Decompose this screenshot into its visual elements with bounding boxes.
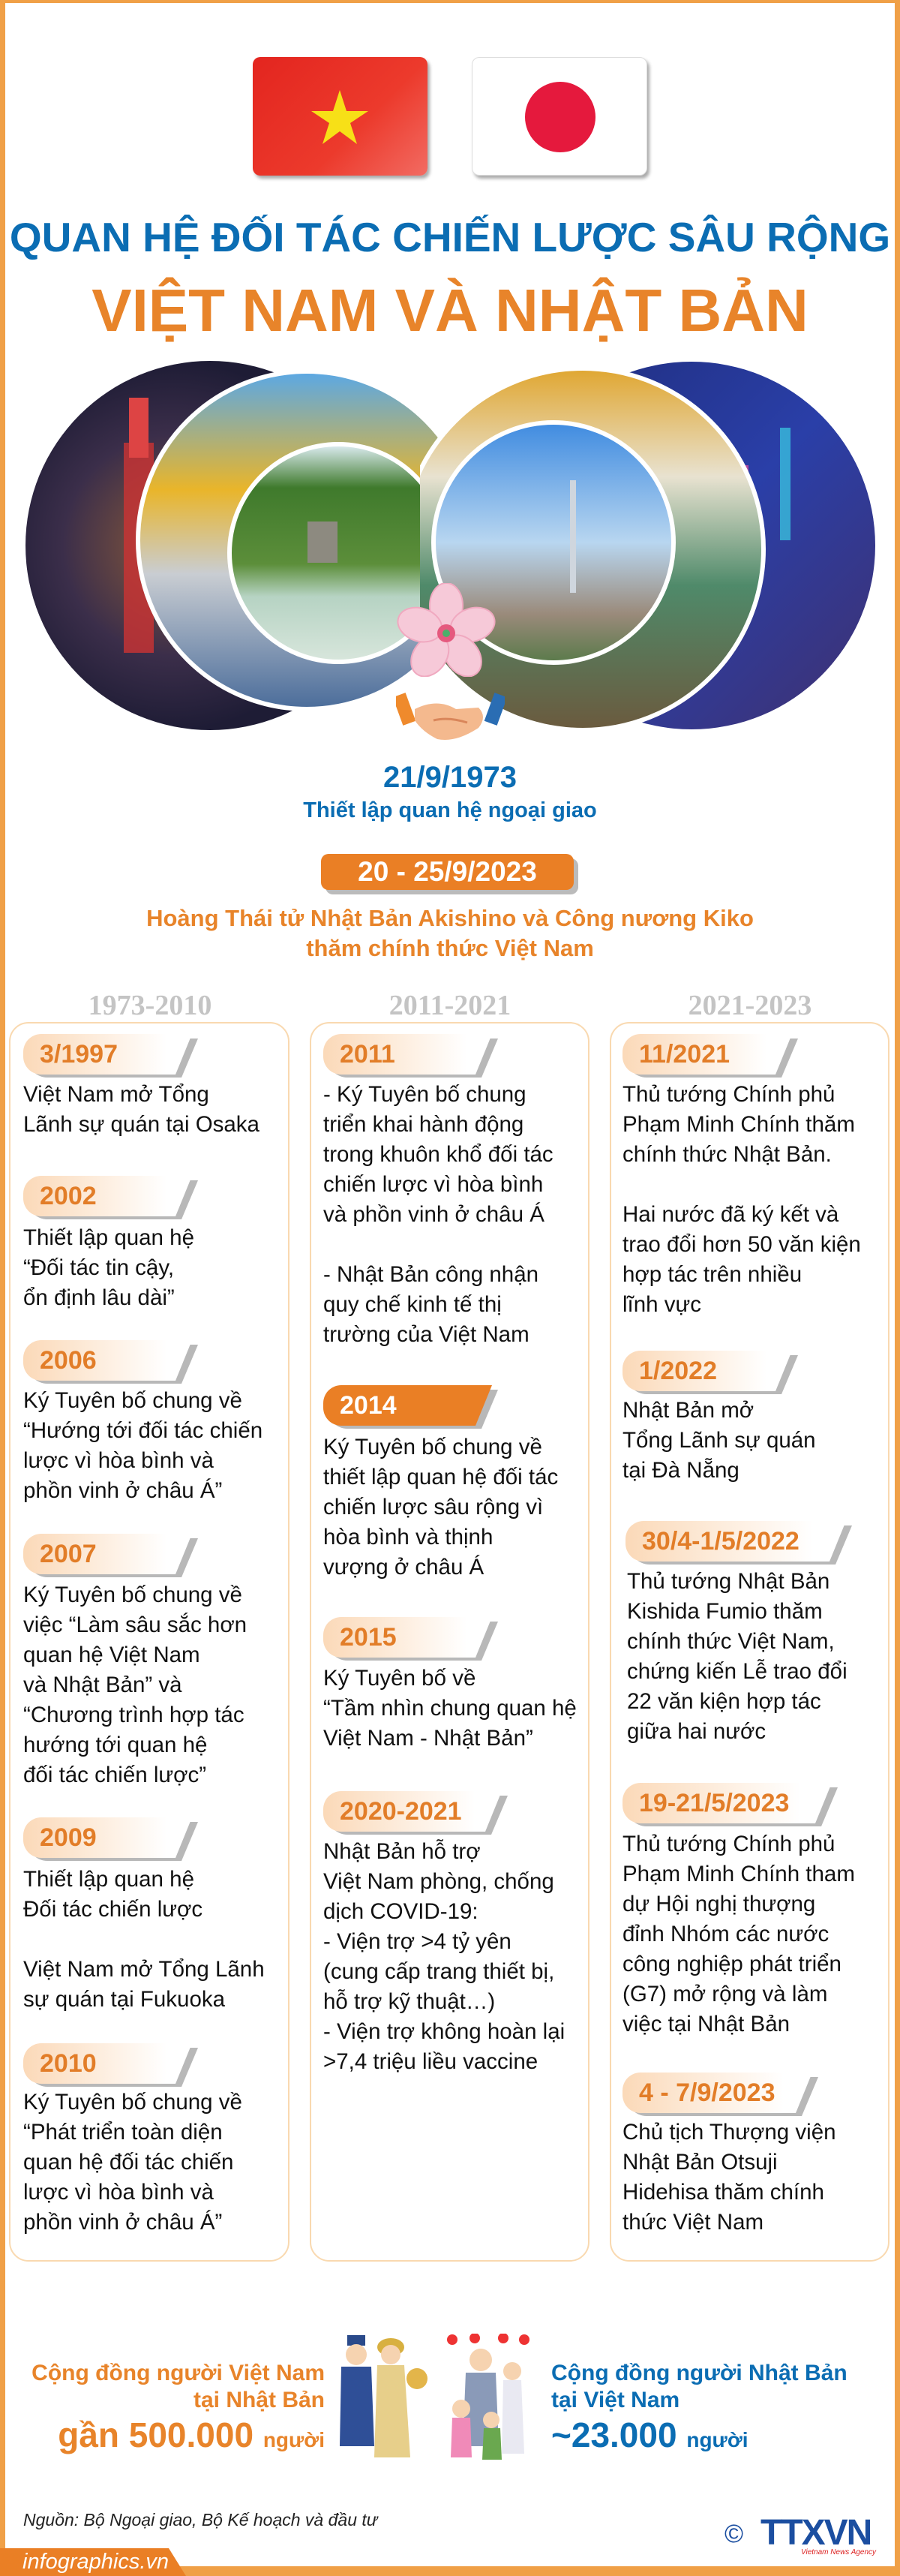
text: 2011: trong khuôn khổ đối tác: [323, 1142, 554, 1167]
text: 1/2022: tại Đà Nẵng: [622, 1458, 740, 1483]
text: 2014: chiến lược sâu rộng vì: [323, 1495, 543, 1519]
footer bar: infographics.vn: [22, 2550, 169, 2574]
text: 11/2021: Phạm Minh Chính thăm: [622, 1112, 855, 1137]
text: 2007: Ký Tuyên bố chung về: [23, 1583, 242, 1607]
text: 2007: quan hệ Việt Nam: [23, 1643, 200, 1667]
text: 19-21/5/2023: dự Hội nghị thượng: [622, 1892, 815, 1916]
column header 1: 1973-2010: [88, 990, 212, 1021]
text: 2010: quan hệ đối tác chiến: [23, 2150, 233, 2175]
pill: 3/1997: 3/1997: [40, 1040, 118, 1069]
text: Vietnamese community in Japan: tại Nhật Bản: [194, 2388, 325, 2412]
pill: 2010: 2010: [40, 2049, 97, 2078]
text: 2015: [323, 1666, 577, 1751]
icon: handshake: [396, 693, 505, 740]
text: 2006: [23, 1388, 262, 1503]
text: 4 - 7/9/2023: [622, 2120, 836, 2235]
text: 2009: Thiết lập quan hệ: [23, 1867, 194, 1892]
text: 2009: [23, 1867, 265, 2012]
pill: 2014: [323, 1385, 498, 1429]
text: 30/4-1/5/2022: 22 văn kiện hợp tác: [627, 1689, 821, 1714]
text: 2010: lược vì hòa bình và: [23, 2180, 214, 2205]
text: 2006: phồn vinh ở châu Á”: [23, 1478, 222, 1503]
text: 4 - 7/9/2023: Chủ tịch Thượng viện: [622, 2120, 836, 2145]
text: 2010: “Phát triển toàn diện: [23, 2120, 223, 2145]
text: 19-21/5/2023: Phạm Minh Chính tham: [622, 1862, 855, 1886]
text: 2006: “Hướng tới đối tác chiến: [23, 1418, 262, 1443]
flag: Vietnam: [253, 57, 428, 176]
text: 19-21/5/2023: Thủ tướng Chính phủ: [622, 1832, 835, 1856]
text: 2011: [323, 1082, 554, 1347]
pill: 19-21/5/2023: [622, 1783, 838, 1826]
text: 2007: đối tác chiến lược”: [23, 1763, 206, 1787]
text: 30/4-1/5/2022: chính thức Việt Nam,: [627, 1629, 835, 1654]
title line 2: VIỆT NAM VÀ NHẬT BẢN: [92, 277, 808, 344]
pill: 4 - 7/9/2023: 4 - 7/9/2023: [639, 2079, 775, 2107]
pill: 2011: [323, 1034, 498, 1078]
text: 2007: “Chương trình hợp tác: [23, 1703, 244, 1727]
text: 2020-2021: Nhật Bản hỗ trợ: [323, 1839, 481, 1864]
pill: 11/2021: [622, 1034, 798, 1078]
panel: 2021-2023: [610, 1022, 890, 2262]
pill: 2007: 2007: [40, 1540, 97, 1568]
text: royal visit: thăm chính thức Việt Nam: [306, 935, 594, 961]
pill: 2020-2021: 2020-2021: [340, 1797, 462, 1826]
text: 2009: Đối tác chiến lược: [23, 1897, 202, 1922]
text: 11/2021: [622, 1082, 861, 1317]
photo collage: Vietnam: [26, 361, 438, 730]
column header 2: 2011-2021: [389, 990, 511, 1021]
text: 11/2021: lĩnh vực: [622, 1292, 701, 1317]
text: 2020-2021: dịch COVID-19:: [323, 1899, 478, 1924]
text: 2007: việc “Làm sâu sắc hơn: [23, 1613, 247, 1637]
text: 4 - 7/9/2023: Hidehisa thăm chính: [622, 2180, 824, 2205]
pill: 2010: [23, 2043, 198, 2087]
text: 2011: triển khai hành động: [323, 1112, 524, 1137]
text: 2020-2021: - Viện trợ không hoàn lại: [323, 2019, 565, 2044]
text: 19-21/5/2023: đỉnh Nhóm các nước: [622, 1922, 829, 1946]
text: Vietnamese community in Japan: Cộng đồng người Việt Nam: [32, 2361, 325, 2385]
text: 30/4-1/5/2022: Thủ tướng Nhật Bản: [627, 1569, 830, 1594]
text: 2002: [23, 1225, 194, 1310]
text: 2009: Việt Nam mở Tổng Lãnh: [23, 1957, 265, 1982]
text: 2011: - Nhật Bản công nhận: [323, 1262, 538, 1287]
text: 2010: [23, 2090, 242, 2235]
text: 2010: Ký Tuyên bố chung về: [23, 2090, 242, 2115]
text: 2014: thiết lập quan hệ đối tác: [323, 1465, 558, 1489]
text: Vietnamese community in Japan: gần 500.000 người: [58, 2415, 325, 2454]
flag: Japan: [472, 57, 647, 176]
text: 2020-2021: [323, 1839, 565, 2074]
text: royal visit: Hoàng Thái tử Nhật Bản Akishino và Công nương Kiko: [146, 905, 754, 931]
title line 1: QUAN HỆ ĐỐI TÁC CHIẾN LƯỢC SÂU RỘNG: [10, 214, 890, 260]
text: Japanese community in Vietnam: [551, 2361, 848, 2454]
text: 30/4-1/5/2022: [627, 1569, 848, 1744]
text: Japanese community in Vietnam: tại Việt Nam: [551, 2388, 680, 2412]
text: 4 - 7/9/2023: Nhật Bản Otsuji: [622, 2150, 778, 2175]
icon: Japanese family: [447, 2334, 530, 2460]
text: 2014: Ký Tuyên bố chung về: [323, 1435, 542, 1459]
text: 19-21/5/2023: [622, 1832, 855, 2036]
text: 4 - 7/9/2023: thức Việt Nam: [622, 2210, 764, 2235]
logo: TTXVN: TTXVN: [760, 2513, 871, 2553]
text: 30/4-1/5/2022: giữa hai nước: [627, 1719, 766, 1744]
pill: 20 - 25/9/2023: [321, 854, 578, 894]
text: 2007: [23, 1583, 247, 1787]
text: 2020-2021: (cung cấp trang thiết bị,: [323, 1959, 554, 1984]
column header 3: 2021-2023: [688, 990, 812, 1021]
pill: 2015: 2015: [340, 1623, 397, 1652]
text: 2020-2021: >7,4 triệu liều vaccine: [323, 2049, 538, 2074]
text: 2011: và phồn vinh ở châu Á: [323, 1202, 544, 1227]
text: 3/1997: Việt Nam mở Tổng: [23, 1082, 209, 1107]
text: 19-21/5/2023: công nghiệp phát triển: [622, 1952, 842, 1976]
pill: 2009: 2009: [40, 1823, 97, 1852]
text: 2007: và Nhật Bản” và: [23, 1673, 182, 1697]
text: 2020-2021: hỗ trợ kỹ thuật…): [323, 1989, 495, 2014]
text: Japanese community in Vietnam: ~23.000 người: [551, 2415, 748, 2454]
pill: 2002: [23, 1176, 198, 1219]
text: Japanese community in Vietnam: Cộng đồng người Nhật Bản: [551, 2361, 848, 2385]
text: 11/2021: chính thức Nhật Bản.: [622, 1142, 832, 1167]
text: 30/4-1/5/2022: Kishida Fumio thăm: [627, 1599, 823, 1624]
text: 2014: [323, 1435, 558, 1580]
source: Nguồn: Bộ Ngoại giao, Bộ Kế hoạch và đầu tư: [23, 2510, 377, 2529]
icon: Vietnamese couple: [340, 2335, 428, 2457]
text: 2002: “Đối tác tin cậy,: [23, 1255, 174, 1280]
text: 1/2022: Tổng Lãnh sự quán: [622, 1428, 816, 1453]
text: 11/2021: trao đổi hơn 50 văn kiện: [622, 1232, 861, 1257]
text: 2002: Thiết lập quan hệ: [23, 1225, 194, 1250]
text: 11/2021: hợp tác trên nhiều: [622, 1262, 802, 1287]
text: 11/2021: Thủ tướng Chính phủ: [622, 1082, 835, 1107]
text: 30/4-1/5/2022: chứng kiến Lễ trao đổi: [627, 1659, 848, 1684]
text: 19-21/5/2023: (G7) mở rộng và làm: [622, 1982, 827, 2006]
panel: 1973-2010: [9, 1022, 290, 2262]
text: 19-21/5/2023: việc tại Nhật Bản: [622, 2012, 790, 2036]
text: 2015: Việt Nam - Nhật Bản”: [323, 1726, 533, 1751]
pill: 2015: [323, 1617, 498, 1661]
panel: 2011-2021: [310, 1022, 590, 2262]
footer bar: [0, 2548, 895, 2576]
pill: 2009: [23, 1817, 198, 1861]
pill: 11/2021: 11/2021: [639, 1040, 730, 1069]
text: 2020-2021: - Viện trợ >4 tỷ yên: [323, 1929, 512, 1954]
date: 21/9/1973: 21/9/1973: [383, 761, 517, 794]
text: 2011: trường của Việt Nam: [323, 1322, 530, 1347]
text: 2011: quy chế kinh tế thị: [323, 1292, 502, 1317]
text: 2015: Ký Tuyên bố về: [323, 1666, 476, 1691]
pill: 2006: [23, 1340, 198, 1384]
pill: 30/4-1/5/2022: [626, 1521, 852, 1565]
pill: 4 - 7/9/2023: [622, 2073, 818, 2116]
text: 2015: “Tầm nhìn chung quan hệ: [323, 1696, 577, 1721]
text: 2006: Ký Tuyên bố chung về: [23, 1388, 242, 1413]
pill: 1/2022: 1/2022: [639, 1357, 717, 1385]
photo collage: Japan: [420, 362, 875, 729]
pill: 19-21/5/2023: 19-21/5/2023: [639, 1789, 789, 1817]
text: 2006: lược vì hòa bình và: [23, 1448, 214, 1473]
text: 2009: sự quán tại Fukuoka: [23, 1987, 225, 2012]
text: 2020-2021: Việt Nam phòng, chống: [323, 1869, 554, 1894]
text: royal visit: [146, 905, 754, 961]
pill: 3/1997: [23, 1034, 198, 1078]
text: 2010: phồn vinh ở châu Á”: [23, 2210, 222, 2235]
pill: 2014: 2014: [340, 1391, 397, 1420]
text: 1/2022: Nhật Bản mở: [622, 1398, 754, 1423]
text: 3/1997: [23, 1082, 260, 1137]
pill: 2002: 2002: [40, 1182, 97, 1210]
pill: 1/2022: [622, 1351, 798, 1394]
text: 2007: hướng tới quan hệ: [23, 1733, 207, 1757]
text: 3/1997: Lãnh sự quán tại Osaka: [23, 1112, 260, 1137]
pill: 20 - 25/9/2023: 20 - 25/9/2023: [358, 856, 537, 887]
text: establishment: Thiết lập quan hệ ngoại giao: [303, 798, 597, 822]
icon: sakura flower: [398, 583, 496, 677]
text: 2011: - Ký Tuyên bố chung: [323, 1082, 526, 1107]
pill: 2006: 2006: [40, 1346, 97, 1375]
pill: 2020-2021: [323, 1791, 508, 1835]
text: Vietnamese community in Japan: [32, 2361, 325, 2454]
pill: 2007: [23, 1534, 198, 1577]
text: 2011: chiến lược vì hòa bình: [323, 1172, 543, 1197]
pill: 30/4-1/5/2022: 30/4-1/5/2022: [642, 1527, 800, 1556]
logo: TTXVN: Vietnam News Agency: [801, 2548, 876, 2556]
logo: TTXVN: [724, 2513, 876, 2556]
text: 2014: vượng ở châu Á: [323, 1555, 484, 1580]
logo: TTXVN: ©: [724, 2520, 743, 2548]
text: 2002: ổn định lâu dài”: [23, 1285, 175, 1310]
text: 2014: hòa bình và thịnh: [323, 1525, 493, 1550]
pill: 2011: 2011: [340, 1040, 395, 1069]
text: 11/2021: Hai nước đã ký kết và: [622, 1202, 838, 1227]
text: 1/2022: [622, 1398, 816, 1483]
